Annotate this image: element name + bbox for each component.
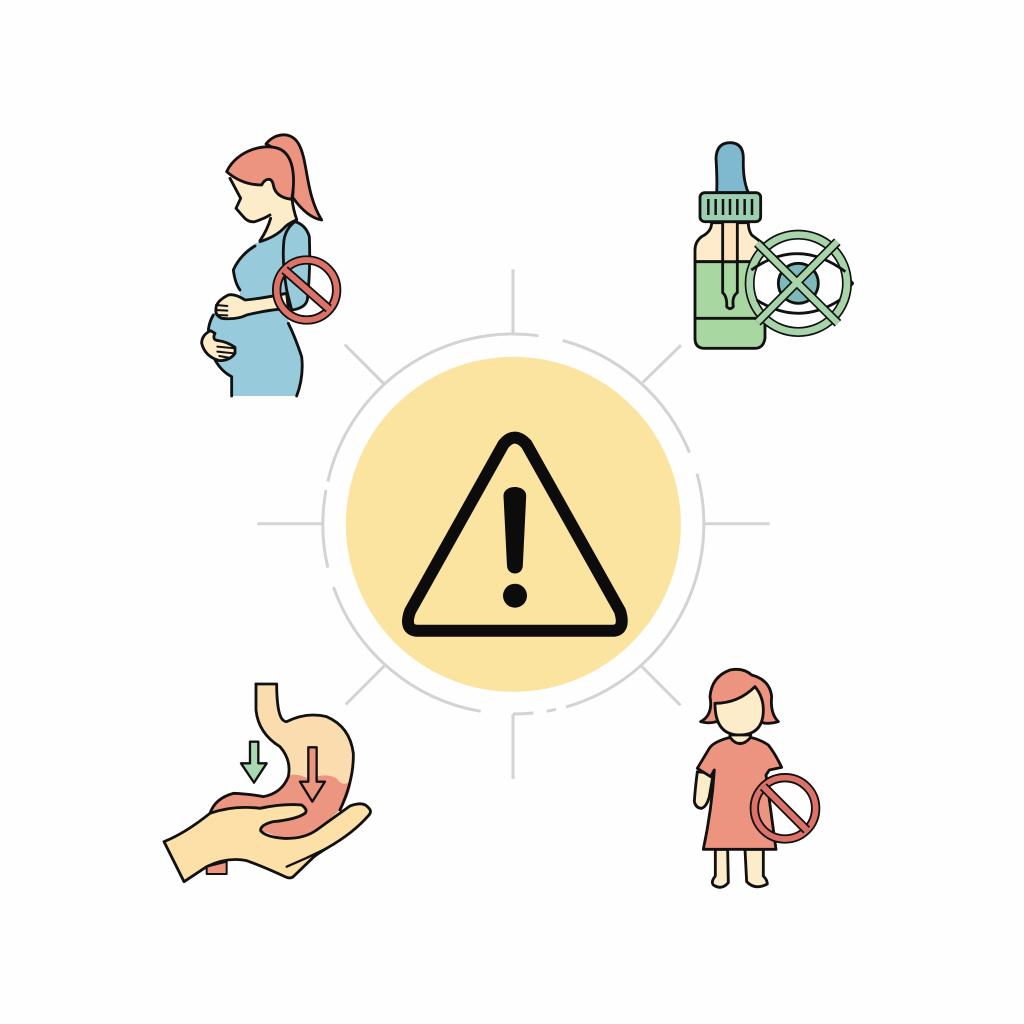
bottle body <box>695 223 765 262</box>
hair <box>227 147 294 199</box>
face <box>715 687 763 735</box>
hair <box>701 669 778 723</box>
dropper pipette <box>723 223 737 262</box>
face and neck <box>230 178 295 242</box>
bottle cap <box>700 193 761 222</box>
legs <box>712 849 728 887</box>
dress <box>697 737 782 849</box>
arrow: green down <box>241 742 267 783</box>
icon: warning triangle <box>408 438 622 631</box>
crossed-out eye target <box>750 235 853 332</box>
prohibition sign <box>277 260 337 320</box>
arms <box>694 772 713 808</box>
stomach <box>210 684 353 838</box>
sleeve <box>283 222 310 310</box>
hand <box>164 804 371 882</box>
icon: stomach held in a hand <box>164 684 371 882</box>
dress <box>208 220 303 396</box>
lower hand <box>202 331 235 361</box>
pylorus stub <box>207 862 227 874</box>
prohibition sign <box>754 778 816 839</box>
central warning circle <box>346 357 681 692</box>
forearm and upper hand <box>216 293 288 319</box>
neck <box>730 735 751 743</box>
icon: pregnant woman with prohibition sign <box>202 135 337 396</box>
dropper bulb <box>716 143 748 193</box>
icon: child with prohibition sign <box>694 669 816 887</box>
ponytail <box>266 135 322 220</box>
arrow: red down <box>300 747 325 802</box>
icon: dropper bottle with crossed-out eye <box>695 143 853 348</box>
